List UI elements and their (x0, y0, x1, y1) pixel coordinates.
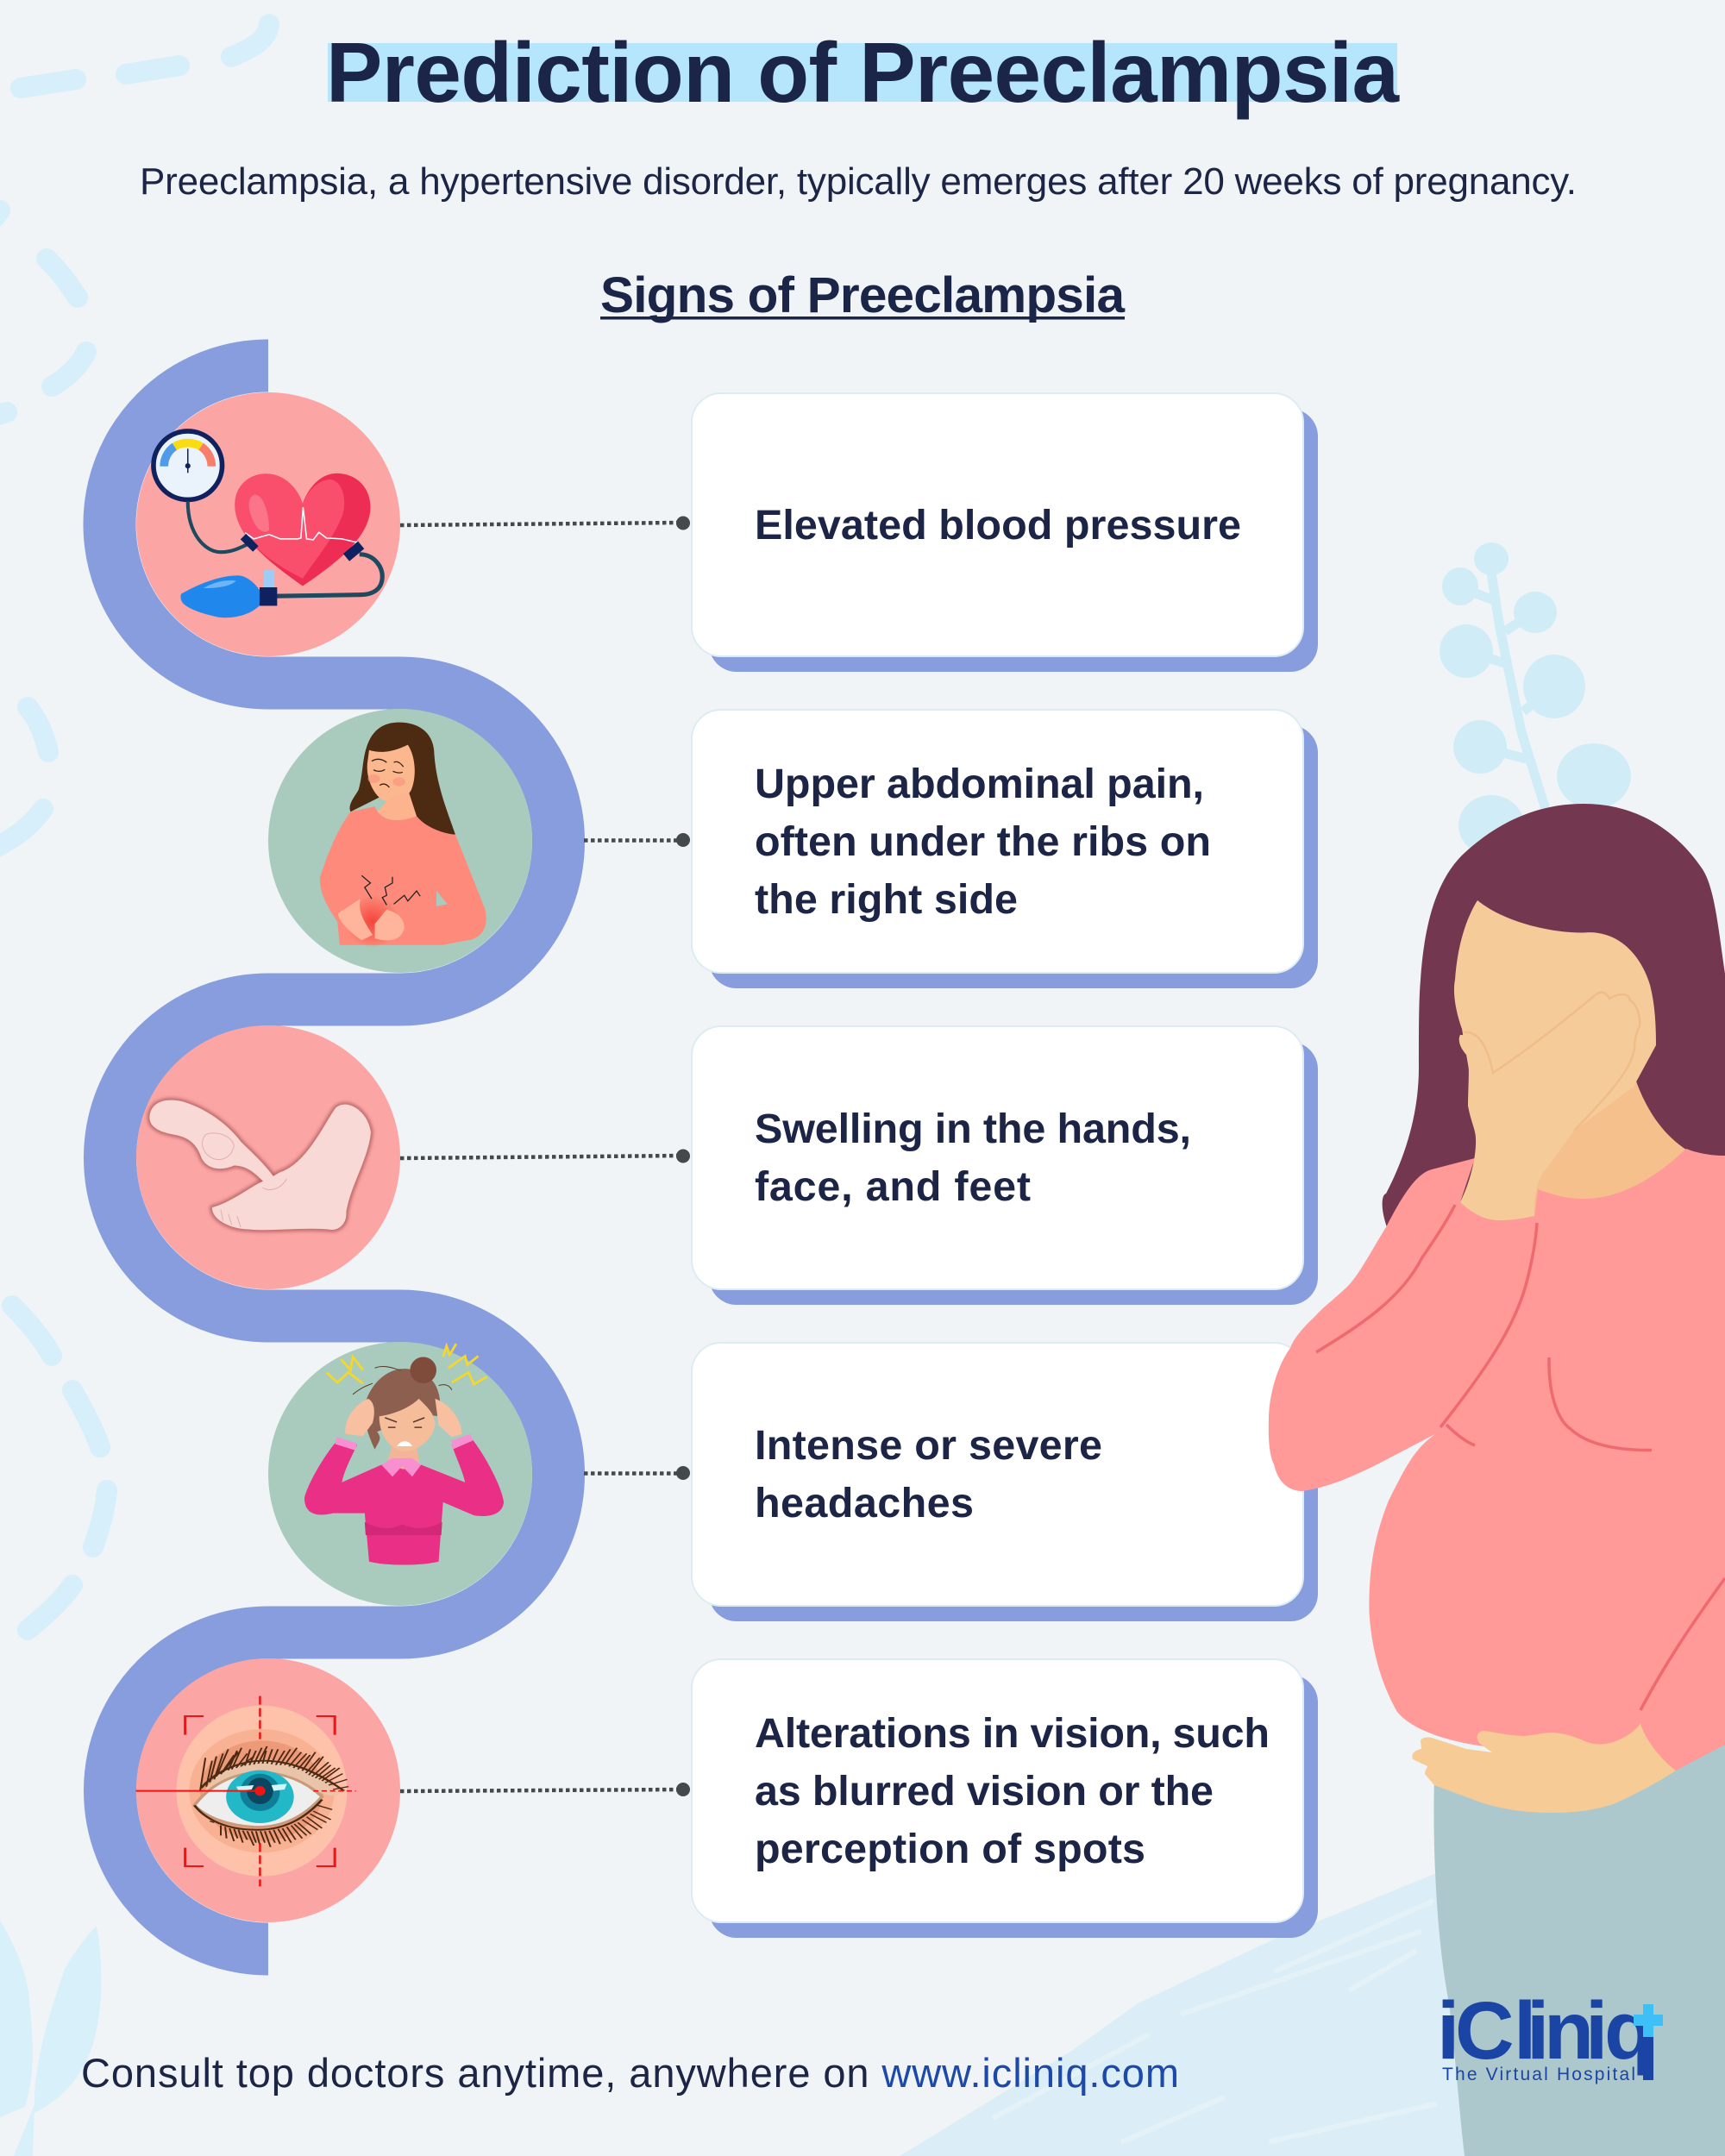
background decoration: bottom-left leaves (0, 1921, 102, 2156)
title: Prediction of Preeclampsia (326, 25, 1400, 120)
subtitle: Preeclampsia, a hypertensive disorder, typically emerges after 20 weeks of pregnancy. (140, 160, 1577, 203)
logo: iCliniq: iCliniq (1437, 1985, 1654, 2077)
card: vision: perception of spots (755, 1826, 1145, 1872)
card: abdominal pain: Upper abdominal pain, (755, 761, 1204, 807)
connector 4 (584, 1466, 690, 1480)
card: vision: as blurred vision or the (755, 1768, 1214, 1814)
icon: woman holding abdomen (320, 723, 486, 948)
connector 1 (400, 516, 690, 530)
footer text: Consult top doctors anytime, anywhere on www.icliniq.com (81, 2050, 1179, 2096)
connector 2 (584, 833, 690, 847)
trousers (1433, 1733, 1725, 2156)
connector 3 (400, 1149, 690, 1163)
illustration: pregnant woman covering her face (1269, 804, 1725, 2156)
card: elevated blood pressure: Elevated blood pressure (755, 502, 1241, 548)
icon: pressure gauge and heart (154, 431, 382, 617)
background decoration: dashes (0, 24, 269, 1630)
card: swelling: face, and feet (755, 1163, 1031, 1210)
card: headaches (692, 1343, 1318, 1621)
panel: abdominal pain icon (268, 709, 532, 973)
serpentine path (110, 366, 559, 1949)
card: abdominal pain (692, 710, 1318, 988)
card: abdominal pain: the right side (755, 876, 1018, 923)
background decoration: bottom-right streaks (900, 1871, 1484, 2156)
panel: vision icon (136, 1658, 400, 1922)
belly hand (1412, 1723, 1676, 1813)
card: vision (692, 1659, 1318, 1938)
icon: eye with target (136, 1696, 356, 1886)
card: vision: Alterations in vision, such (755, 1710, 1270, 1757)
panel: headache icon (268, 1342, 532, 1606)
hair (1383, 804, 1725, 1227)
icon: woman with headache (304, 1344, 504, 1565)
card: swelling: Swelling in the hands, (755, 1106, 1191, 1152)
hand and forearm (1459, 992, 1641, 1220)
card: elevated blood pressure (692, 393, 1318, 672)
panel: swelling icon (136, 1025, 400, 1289)
connector 5 (400, 1783, 690, 1796)
logo: iCliniq: The Virtual Hospital (1442, 2065, 1635, 2084)
card: headaches: Intense or severe (755, 1422, 1102, 1469)
card: abdominal pain: often under the ribs on (755, 818, 1211, 865)
section heading: Signs of Preeclampsia (600, 267, 1125, 323)
sweater body (1269, 1149, 1725, 1771)
card: swelling (692, 1026, 1318, 1305)
icon: finger pressing swollen foot (149, 1100, 371, 1230)
panel: elevated blood pressure icon (136, 392, 400, 656)
hand outline (1464, 993, 1640, 1131)
card: headaches: headaches (755, 1480, 974, 1526)
background decoration: plant (1440, 542, 1631, 856)
face (1454, 900, 1656, 1172)
neck (1531, 1074, 1686, 1220)
sweater fold lines (1316, 1205, 1725, 1710)
